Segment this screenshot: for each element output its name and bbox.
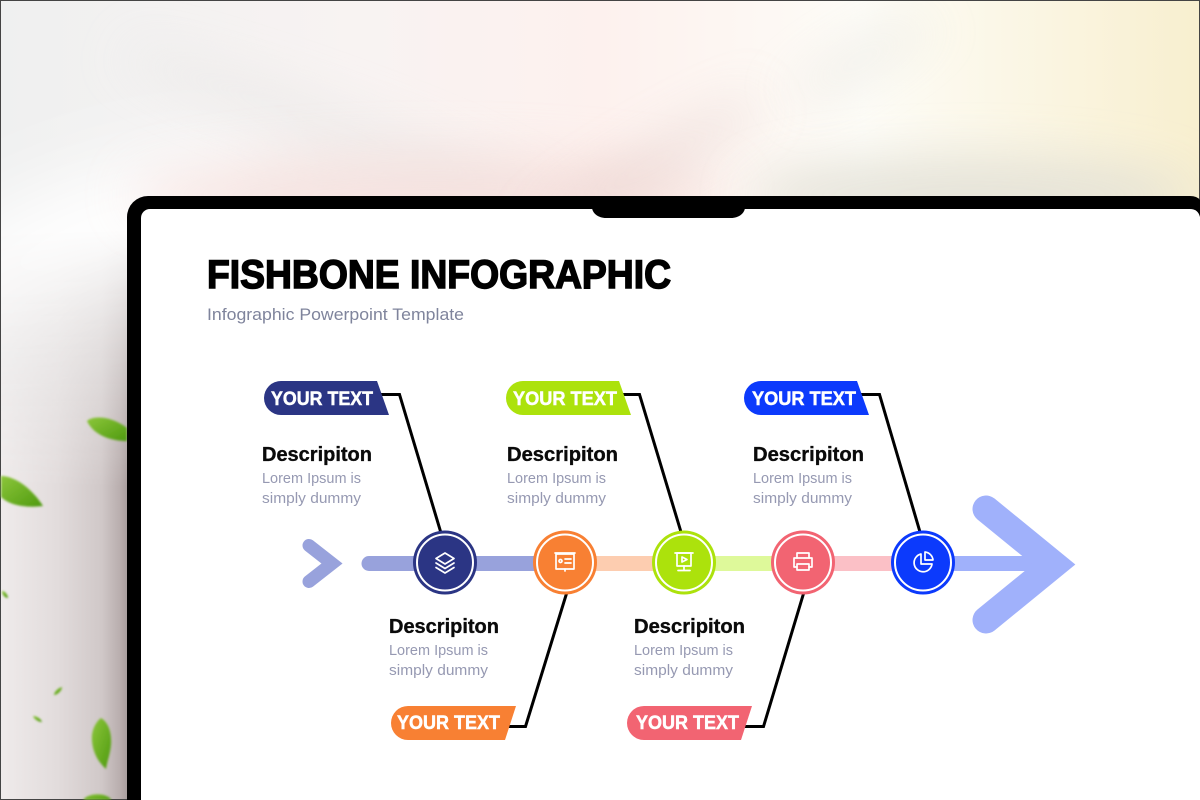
description 5: Lorem Ipsum is bbox=[753, 471, 852, 487]
subtitle: Infographic Powerpoint Template bbox=[207, 305, 464, 324]
tag 1 bbox=[264, 381, 389, 415]
arrow head bbox=[986, 509, 1054, 620]
node 5: pie chart bbox=[891, 530, 955, 594]
description 3: Descripiton bbox=[507, 444, 618, 466]
title: FISHBONE INFOGRAPHIC bbox=[207, 253, 671, 297]
tag 4 bbox=[627, 706, 752, 740]
description 4: Descripiton bbox=[634, 616, 745, 638]
tag 5: YOUR TEXT bbox=[752, 388, 856, 410]
description 2 bbox=[389, 616, 499, 679]
description 5: simply dummy bbox=[753, 491, 853, 507]
node 2: presentation bbox=[533, 530, 597, 594]
tag 3 bbox=[506, 381, 631, 415]
tag 1: YOUR TEXT bbox=[271, 388, 373, 410]
icon: presentation board bbox=[555, 553, 575, 571]
description 5 bbox=[753, 444, 864, 507]
description 4 bbox=[634, 616, 745, 679]
node 1: layers bbox=[413, 530, 477, 594]
description 1: Lorem Ipsum is bbox=[262, 471, 361, 487]
falling green leaves bbox=[1, 418, 127, 800]
fishbone spine bbox=[369, 556, 1050, 571]
description 4: Lorem Ipsum is bbox=[634, 643, 733, 659]
tag 4: YOUR TEXT bbox=[636, 712, 739, 734]
tag 5 bbox=[744, 381, 869, 415]
description 2: Descripiton bbox=[389, 616, 499, 638]
description 1: simply dummy bbox=[262, 491, 362, 507]
icon: play screen bbox=[675, 553, 693, 570]
description 4: simply dummy bbox=[634, 663, 734, 679]
tag 2: YOUR TEXT bbox=[397, 712, 500, 734]
description 5: Descripiton bbox=[753, 444, 864, 466]
icon: pie chart bbox=[914, 552, 933, 572]
icon: printer bbox=[794, 553, 812, 570]
device notch bbox=[592, 205, 745, 218]
icon: layers bbox=[436, 553, 454, 573]
fish tail chevron bbox=[309, 546, 332, 582]
description 1 bbox=[262, 444, 372, 507]
description 2: simply dummy bbox=[389, 663, 489, 679]
description 3 bbox=[507, 444, 618, 507]
node 3: play screen bbox=[652, 530, 716, 594]
description 1: Descripiton bbox=[262, 444, 372, 466]
tag 3: YOUR TEXT bbox=[513, 388, 617, 410]
description 2: Lorem Ipsum is bbox=[389, 643, 488, 659]
description 3: Lorem Ipsum is bbox=[507, 471, 606, 487]
tag 2 bbox=[391, 706, 516, 740]
node 4: printer bbox=[771, 530, 835, 594]
connector lines bbox=[381, 394, 920, 726]
description 3: simply dummy bbox=[507, 491, 607, 507]
device frame bbox=[127, 196, 1200, 800]
